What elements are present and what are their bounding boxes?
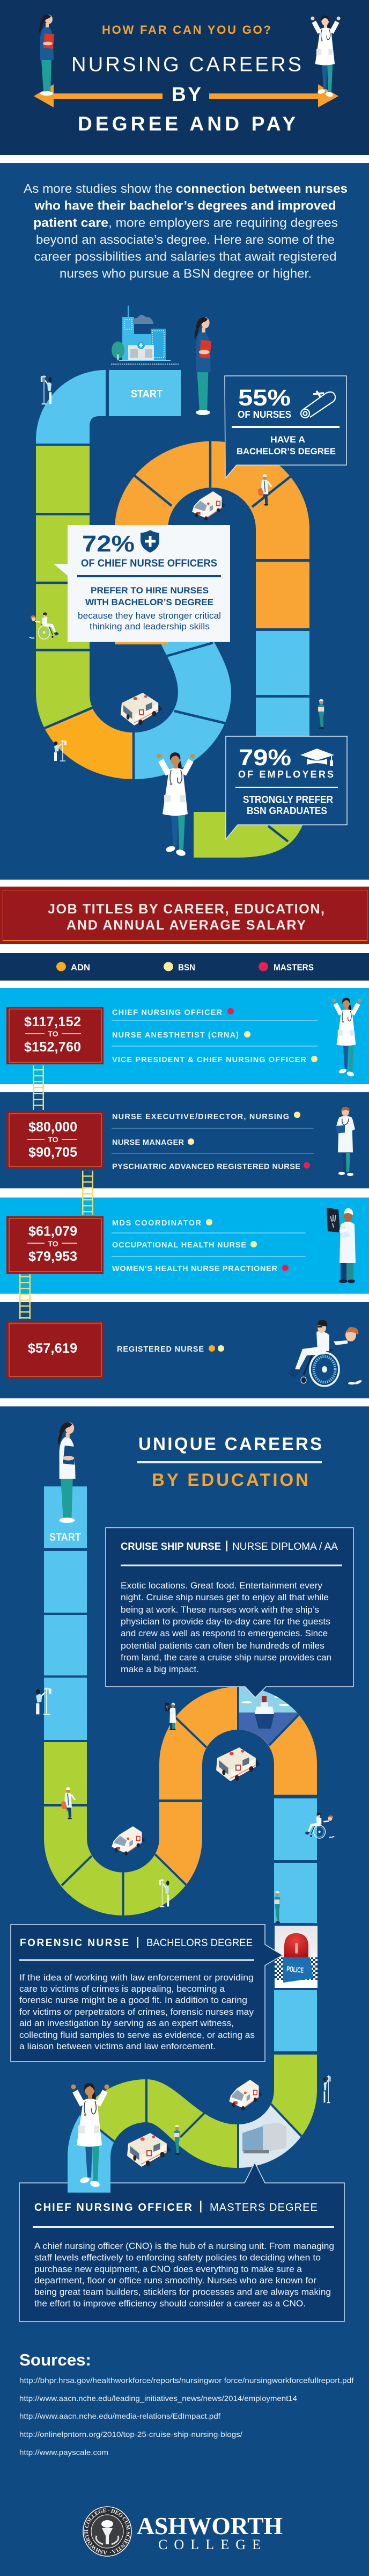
salary sign 1: TO bbox=[48, 1029, 58, 1038]
heading: unique careers by education: BY EDUCATION bbox=[152, 1470, 308, 1490]
job list: CHIEF NURSING OFFICER bbox=[112, 1008, 223, 1017]
title line: degree and pay: DEGREE AND PAY bbox=[78, 113, 296, 135]
intro paragraph: career possibilities and salaries that await registered bbox=[34, 250, 337, 264]
figure: nurse with IV stand bbox=[54, 740, 67, 761]
ambulance on upper arch bbox=[192, 491, 225, 520]
cruise ship body text: potential patients can often be hundreds of miles bbox=[121, 1641, 324, 1651]
tile dividers bbox=[62, 1684, 301, 2169]
icon: hospital buildings bbox=[112, 306, 171, 361]
green tiles on left column bbox=[36, 446, 92, 728]
figure: doctor with raised arms bbox=[311, 16, 341, 98]
figure: doctor holding x-ray bbox=[327, 1208, 356, 1283]
sources list bbox=[19, 2350, 354, 2457]
blue ring segment bbox=[134, 642, 231, 779]
callout: cruise ship nurse: NURSE DIPLOMA / AA bbox=[232, 1541, 338, 1552]
orange arch bbox=[115, 441, 309, 644]
salary sign 3: $79,953 bbox=[28, 1249, 77, 1264]
dashed ground line bbox=[111, 364, 179, 365]
hospital tile bbox=[239, 2104, 301, 2168]
forensic nurse body text: forensic nurse might be a good fit. In addition to caring bbox=[19, 1996, 247, 2005]
job list bbox=[112, 1112, 314, 1171]
salary sign 3: TO bbox=[48, 1239, 58, 1248]
salary sign 2: $90,705 bbox=[28, 1145, 77, 1160]
sources list: http://onlinelpntorn.org/2010/top-25-cruise-ship-nursing-blogs/ bbox=[19, 2430, 242, 2439]
icon: shield with cross bbox=[141, 530, 159, 553]
figure: small doctor with x-ray bbox=[165, 1702, 176, 1730]
CNO body text: department, floor or office runs smoothly. Nurses who are known for bbox=[34, 2275, 316, 2285]
job list: VICE PRESIDENT & CHIEF NURSING OFFICER bbox=[112, 1056, 307, 1064]
callout: 79 percent of employers: 79% bbox=[239, 745, 291, 771]
CNO body text: being great team builders, sticklers for processes and are always making bbox=[34, 2287, 331, 2297]
CNO body text: the effort to improve efficiency should consider a career as a CNO. bbox=[34, 2298, 306, 2309]
callout: 72 percent of chief nurse officers: thinking and leadership skills bbox=[90, 621, 210, 632]
salary sign 3 bbox=[6, 1216, 104, 1274]
callout: 55 percent of nurses: HAVE A bbox=[270, 434, 305, 445]
cruise ship body text: being at work. These nurses work with the ship’s bbox=[121, 1605, 319, 1615]
cruise ship body text bbox=[121, 1580, 331, 1674]
figure: wheelchair patient bbox=[29, 612, 59, 639]
sources list: Sources: bbox=[19, 2350, 91, 2369]
tile dividers bbox=[45, 440, 291, 841]
forensic nurse body text bbox=[19, 1973, 255, 2051]
S-curve green bbox=[80, 2079, 237, 2168]
salary band 3 bbox=[0, 1198, 369, 1294]
ambulance in lower trough bbox=[112, 1826, 145, 1855]
orange rise bbox=[155, 1802, 202, 1885]
icon: modern hospital building bbox=[242, 2123, 286, 2153]
orange arch bbox=[159, 1687, 317, 1799]
figure: nurse with IV by right column bbox=[323, 2076, 330, 2102]
callout: chief nursing officer: MASTERS DEGREE bbox=[210, 2202, 318, 2214]
salary sign 2: $80,000 bbox=[28, 1120, 77, 1135]
forensic nurse body text: If the idea of working with law enforcement or providing bbox=[19, 1973, 254, 1983]
legend item: ADN bbox=[56, 962, 90, 973]
start tile: START bbox=[131, 388, 163, 400]
ladder between salary 2 and 3 bbox=[82, 1171, 93, 1215]
callout: chief nursing officer bbox=[19, 2163, 344, 2321]
ambulance in lower ring bbox=[121, 693, 163, 725]
forensic nurse body text: a liaison between victims and law enforcement. bbox=[19, 2042, 216, 2051]
sources list: http://bhpr.hrsa.gov/healthworkforce/reports/nursingwor force/nursingworkforcefullreport.pdf bbox=[19, 2376, 354, 2385]
legend item: masters bbox=[259, 962, 314, 973]
figure: man with bag bbox=[61, 1787, 75, 1819]
intro paragraph: patient care bbox=[33, 215, 108, 229]
CNO body text: purchase new equipment, a CNO does everything to make sure a bbox=[34, 2264, 302, 2274]
arrow pointing left bbox=[34, 84, 163, 107]
salary sign 2: TO bbox=[48, 1135, 58, 1144]
callout: 72 percent of chief nurse officers: PREFER TO HIRE NURSES bbox=[91, 585, 209, 596]
banner: job titles heading: JOB TITLES BY CAREER, EDUCATION, bbox=[48, 902, 324, 917]
figure: large doctor arms raised bbox=[157, 752, 195, 857]
start label: START bbox=[49, 1532, 81, 1543]
intro paragraph bbox=[24, 182, 348, 280]
sources list: http://www.aacn.nche.edu/media-relations/EdImpact.pdf bbox=[19, 2412, 220, 2420]
cruise ship body text: physician to provide day-to-day care for the guests bbox=[121, 1616, 330, 1627]
callout: chief nursing officer: CHIEF NURSING OFFICER bbox=[34, 2202, 193, 2214]
figure: nurse with IV, trough bbox=[159, 1879, 169, 1906]
icon: diploma scroll bbox=[301, 391, 335, 418]
salary sign 3: $61,079 bbox=[28, 1224, 77, 1239]
intro paragraph: nurses who pursue a BSN degree or higher. bbox=[60, 266, 312, 280]
callout: 55 percent of nurses: 55% bbox=[238, 385, 291, 411]
logo: Ashworth College: COLLEGE bbox=[158, 2537, 261, 2552]
callout: forensic nurse: BACHELORS DEGREE bbox=[146, 1938, 253, 1949]
arrow pointing right bbox=[209, 84, 338, 107]
salary band 1 bbox=[0, 988, 369, 1084]
salary sign 4: $57,619 bbox=[28, 1341, 77, 1356]
callout: 79 percent of employers bbox=[226, 736, 347, 839]
logo: Ashworth College bbox=[83, 2506, 283, 2557]
title word: by: BY bbox=[172, 83, 201, 105]
figure: doctor arms raised bbox=[332, 998, 361, 1077]
left column tiles bbox=[44, 1486, 87, 1804]
ambulance under arch bbox=[127, 2133, 171, 2167]
CNO body text: A chief nursing officer (CNO) is the hub of a nursing unit. From managing bbox=[34, 2241, 334, 2251]
CNO body text: staff levels effectively to enforcing safety policies to deciding when to bbox=[34, 2253, 321, 2263]
right column tiles bbox=[256, 562, 309, 765]
job list: MDS COORDINATOR bbox=[112, 1219, 202, 1228]
figure: nurse standing by start bbox=[195, 317, 211, 415]
police tile bbox=[275, 1926, 318, 1988]
figure: doctor with IV stand bbox=[41, 375, 51, 404]
police tile: POLICE bbox=[286, 1964, 304, 1975]
job list: PYSCHIATRIC ADVANCED REGISTERED NURSE bbox=[112, 1163, 300, 1171]
salary sign 1 bbox=[6, 1007, 104, 1064]
callout: cruise ship nurse: CRUISE SHIP NURSE bbox=[121, 1541, 221, 1552]
board path: first game path bbox=[36, 370, 309, 858]
figure: man carrying bag bbox=[258, 474, 271, 506]
legend item: BSN bbox=[164, 962, 195, 973]
forensic nurse body text: aid an investigation by serving as an expert witness, bbox=[19, 2019, 234, 2028]
banner: job titles heading: AND ANNUAL AVERAGE SALARY bbox=[67, 918, 306, 933]
callout: 72 percent of chief nurse officers: WITH BACHELOR’S DEGREE bbox=[85, 597, 213, 607]
intro paragraph: who have their bachelor’s degrees and improved bbox=[34, 199, 336, 213]
figure: small nurse under arch bbox=[174, 2125, 180, 2155]
job list: NURSE MANAGER bbox=[112, 1138, 184, 1147]
figure: patient in wheelchair with nurse bbox=[288, 1320, 362, 1386]
heading: unique careers by education bbox=[137, 1434, 322, 1490]
forensic nurse body text: for victims or perpetrators of crimes, forensic nurses may bbox=[19, 2007, 254, 2017]
salary sign 1: $117,152 bbox=[24, 1014, 81, 1029]
green column and trough bbox=[271, 2055, 317, 2136]
panel: first board background bbox=[0, 163, 369, 880]
CNO body text bbox=[34, 2241, 334, 2309]
legend item: masters: MASTERS bbox=[274, 962, 314, 973]
salary band 2 bbox=[0, 1092, 369, 1188]
cruise ship body text: night. Cruise ship nurses get to enjoy all that while bbox=[121, 1592, 329, 1602]
corner tile bbox=[36, 370, 106, 444]
callout: 79 percent of employers: OF EMPLOYERS bbox=[238, 769, 334, 780]
callout: 72 percent of chief nurse officers bbox=[54, 525, 230, 642]
kicker: how far can you go: HOW FAR CAN YOU GO? bbox=[102, 23, 271, 37]
banner: job titles heading bbox=[0, 887, 369, 944]
job list: OCCUPATIONAL HEALTH NURSE bbox=[112, 1241, 246, 1250]
callout: 55 percent of nurses: BACHELOR’S DEGREE bbox=[237, 446, 336, 456]
figure: nurse with red clipboard bbox=[39, 15, 54, 96]
salary sign 2 bbox=[6, 1112, 104, 1169]
board path: second game path bbox=[44, 1486, 318, 2169]
cruise ship tile bbox=[239, 1687, 299, 1746]
job list: NURSE ANESTHETIST (CRNA) bbox=[112, 1031, 239, 1040]
legend item: ADN: ADN bbox=[71, 962, 90, 973]
callout: 79 percent of employers: STRONGLY PREFER bbox=[243, 794, 333, 805]
divider above blue tile bbox=[80, 2114, 114, 2142]
header panel bbox=[0, 0, 369, 155]
right column tiles bbox=[274, 1798, 317, 2051]
figure: nurse in white top bbox=[58, 1423, 76, 1523]
forensic nurse body text: care to victims of crimes is appealing, becoming a bbox=[19, 1984, 225, 1994]
job list bbox=[112, 1008, 318, 1064]
job list: REGISTERED NURSE bbox=[117, 1345, 204, 1354]
callout: 55 percent of nurses: OF NURSES bbox=[238, 409, 291, 420]
start tile bbox=[109, 370, 181, 416]
icon: graduation cap bbox=[300, 749, 334, 766]
callout: forensic nurse: FORENSIC NURSE bbox=[20, 1938, 129, 1949]
orange ring segment bbox=[45, 708, 134, 779]
figure: small nurse by column bbox=[275, 1891, 280, 1924]
callout: 72 percent of chief nurse officers: 72% bbox=[82, 531, 135, 557]
job list bbox=[112, 1219, 306, 1273]
ambulance near S-curve top bbox=[229, 2080, 262, 2110]
figure: small wheelchair patient bbox=[305, 1812, 335, 1838]
intro paragraph: connection between nurses bbox=[176, 182, 348, 195]
seal: ASHWORTH COLLEGE · DEO CUM SCIENTIA · bbox=[84, 2508, 130, 2555]
icon: cruise ship bbox=[255, 1696, 274, 1729]
logo: Ashworth College: ASHWORTH bbox=[137, 2512, 283, 2539]
title line: nursing careers: NURSING CAREERS bbox=[71, 54, 301, 76]
callout: cruise ship nurse bbox=[106, 1528, 353, 1697]
cruise ship body text: and crew as well as respond to emergencies. Since bbox=[121, 1628, 328, 1638]
callout: 79 percent of employers: BSN GRADUATES bbox=[247, 806, 327, 816]
blue tile overlapping the callout bbox=[68, 2114, 114, 2193]
salary band 4 bbox=[0, 1302, 369, 1398]
cruise ship body text: Exotic locations. Great food. Entertainment every bbox=[121, 1580, 322, 1591]
callout: 72 percent of chief nurse officers: OF CHIEF NURSE OFFICERS bbox=[81, 557, 217, 569]
cruise ship body text: make a big impact. bbox=[121, 1664, 199, 1674]
ambulance in upper arch bbox=[216, 1747, 260, 1781]
legend bbox=[0, 953, 369, 981]
green tail curve bbox=[194, 767, 309, 858]
figure: nurse with clipboard bbox=[336, 1107, 355, 1176]
sources list: http://www.payscale.com bbox=[19, 2448, 108, 2457]
figure: small nurse with cap bbox=[318, 699, 324, 729]
job list: WOMEN’S HEALTH NURSE PRACTIONER bbox=[112, 1265, 278, 1273]
green trough bbox=[44, 1806, 186, 1915]
callout: 72 percent of chief nurse officers: because they have stronger critical bbox=[78, 611, 221, 621]
intro paragraph: , more employers are requiring degrees bbox=[108, 215, 338, 229]
intro paragraph: beyond an associate’s degree. Here are some of the bbox=[36, 233, 335, 246]
panel: second board background bbox=[0, 1406, 369, 2576]
salary sign 4 bbox=[6, 1321, 104, 1378]
callout: 55 percent of nurses bbox=[225, 376, 346, 478]
callout: forensic nurse bbox=[11, 1925, 283, 2062]
ladder between salary 1 and 2 bbox=[33, 1065, 44, 1110]
job list: NURSE EXECUTIVE/DIRECTOR, NURSING bbox=[112, 1113, 289, 1121]
intro paragraph: As more studies show the bbox=[24, 182, 173, 195]
figure: doctor arms raised at finish bbox=[71, 2083, 109, 2188]
forensic nurse body text: collecting fluid samples to serve as evidence, or acting as bbox=[19, 2030, 255, 2040]
cruise ship body text: from land, the care a cruise ship nurse provides can bbox=[121, 1652, 331, 1663]
ladder between salary 3 and 4 bbox=[19, 1274, 31, 1319]
sources list: http://www.aacn.nche.edu/leading_initiatives_news/news/2014/employment14 bbox=[19, 2394, 297, 2403]
heading: unique careers by education: UNIQUE CAREERS bbox=[138, 1434, 322, 1454]
salary sign 1: $152,760 bbox=[24, 1040, 81, 1055]
figure: nurse with IV stand, left column bbox=[36, 1688, 51, 1714]
legend item: BSN: BSN bbox=[178, 962, 195, 973]
